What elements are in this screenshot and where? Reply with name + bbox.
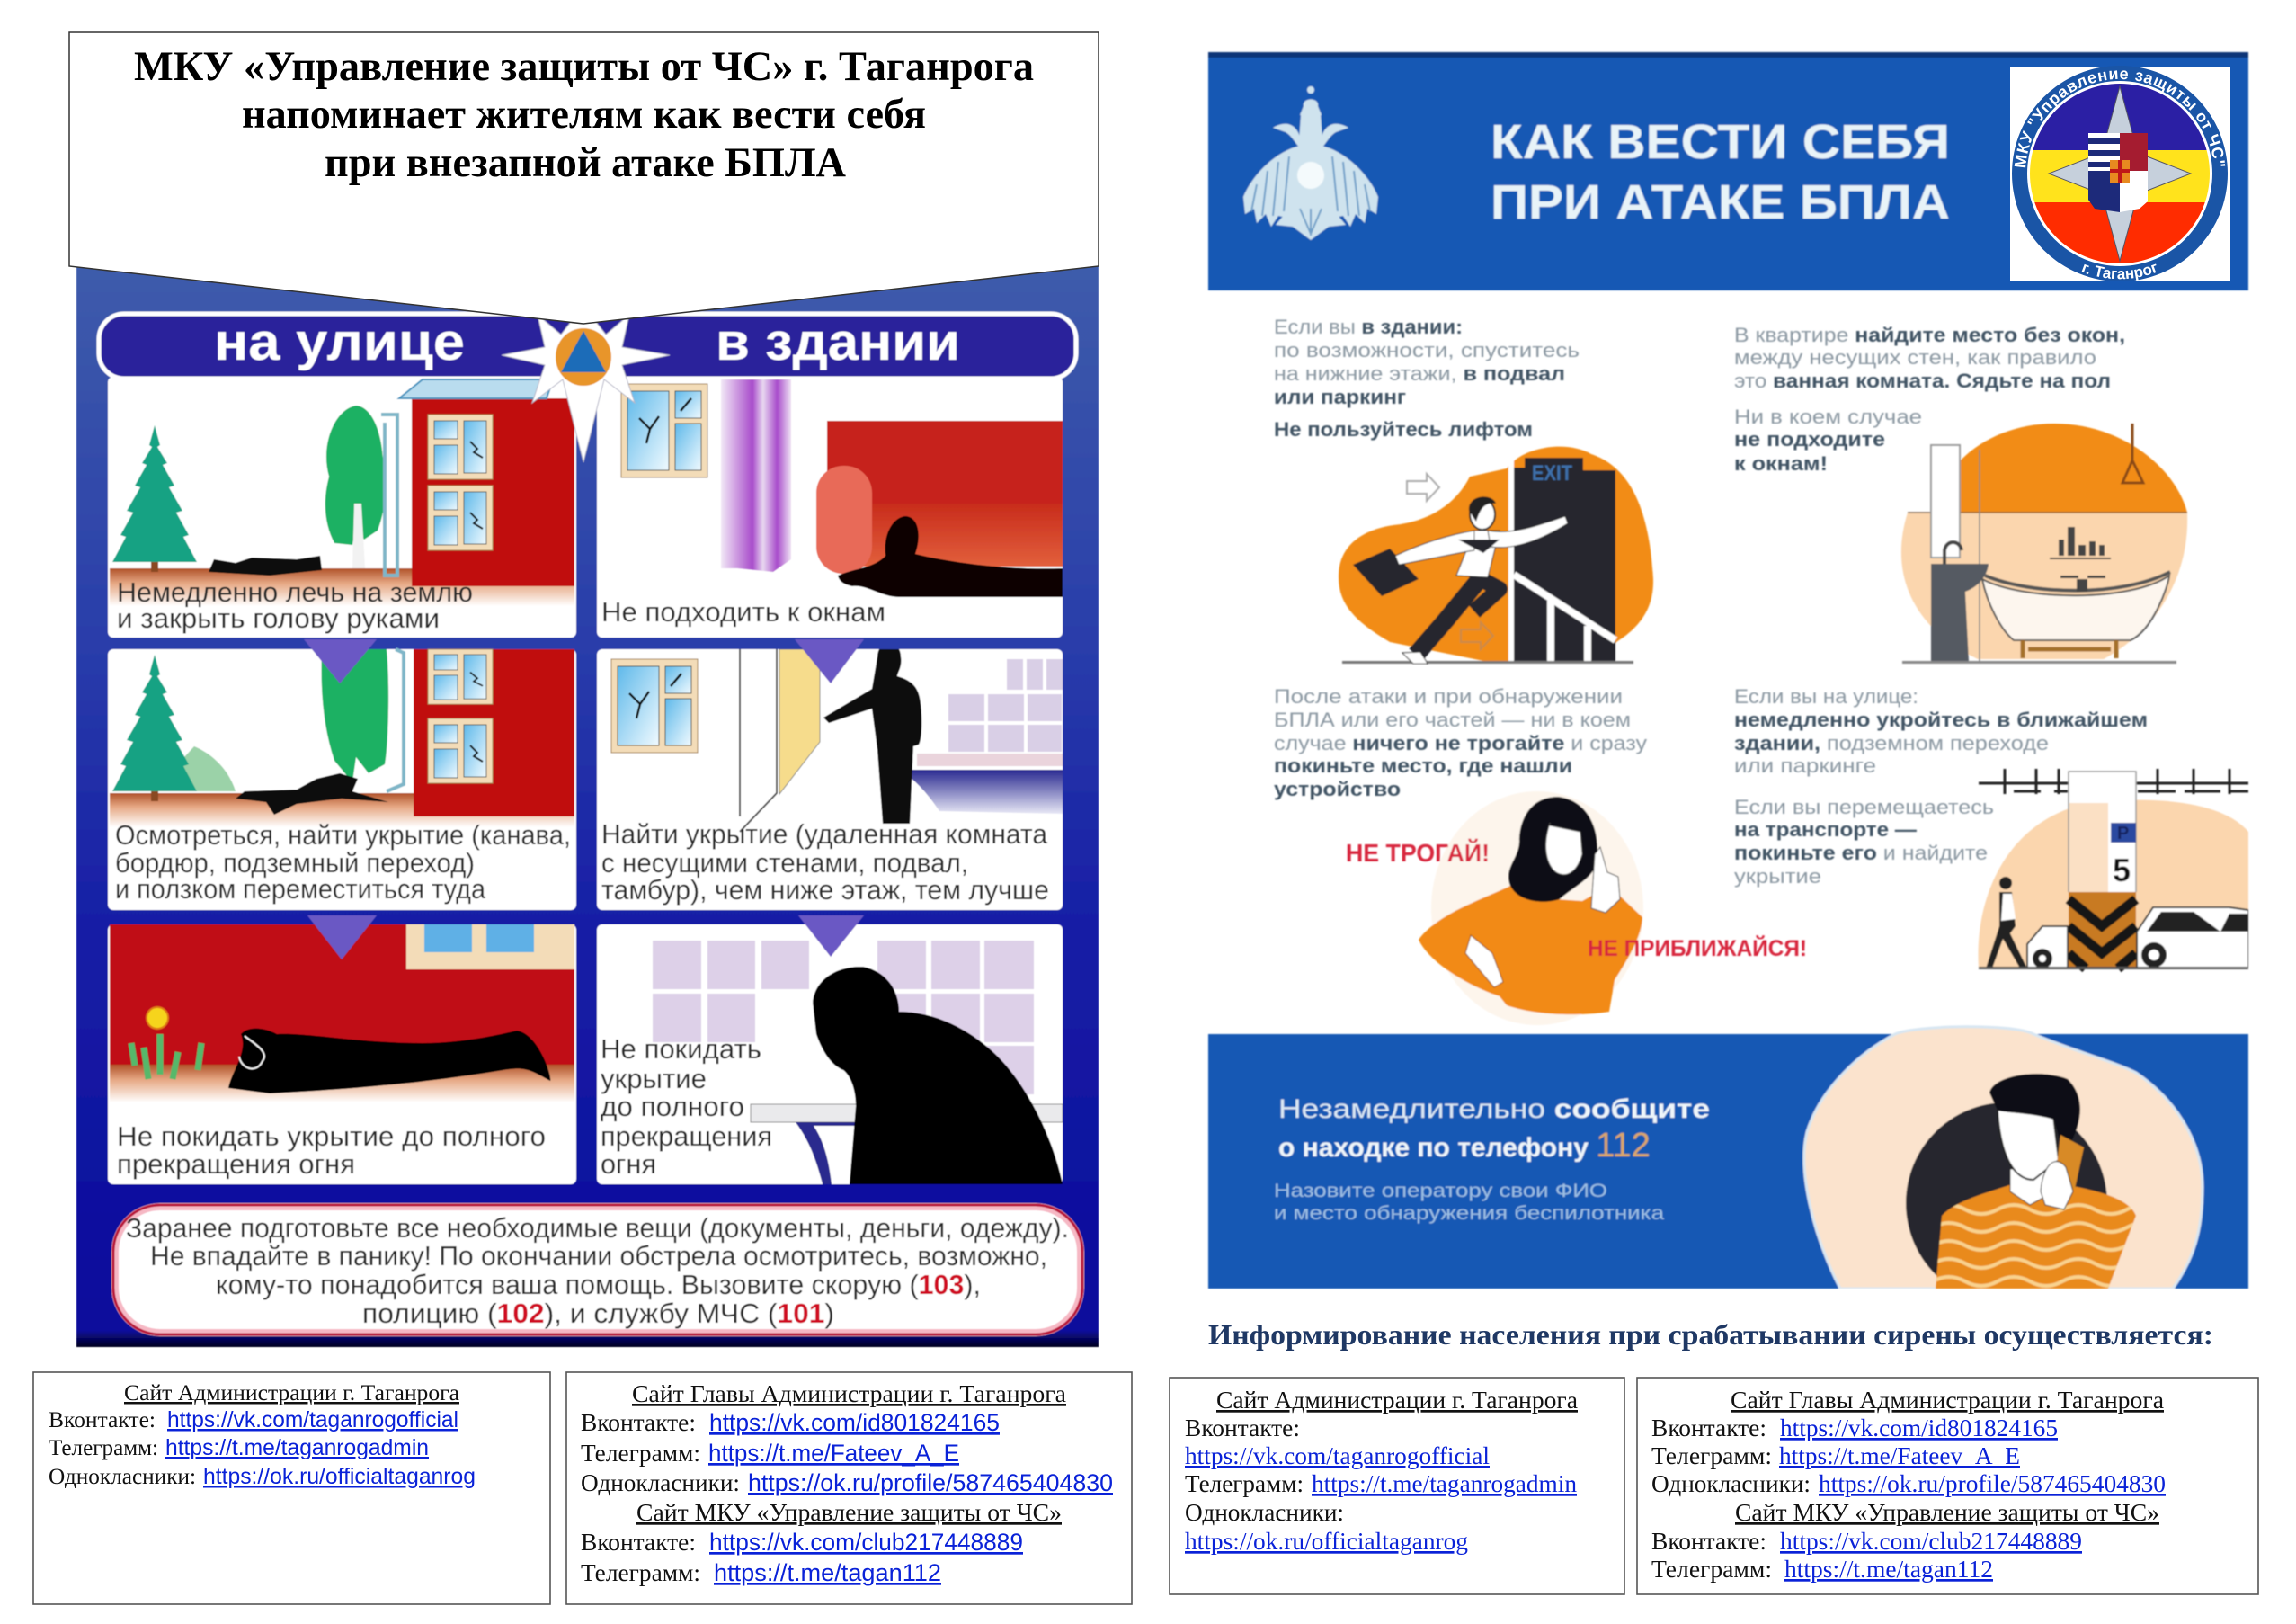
title: МКУ «Управление защиты от ЧС» г. Таганрога: [134, 43, 1034, 90]
section: text outdoors and transport: покиньте его и найдите: [1734, 842, 1988, 864]
caption: Не подходить к окнам: [601, 596, 885, 628]
contacts box: city administration (left): https://t.me/taganrogadmin: [165, 1435, 429, 1460]
section: text in apartment: не подходите: [1734, 428, 1885, 451]
section: text outdoors and transport: Если вы перемещаетесь: [1734, 796, 1994, 818]
contacts box: head of administration and MKU (right): Телеграмм:: [1651, 1556, 1772, 1583]
section: text outdoors and transport: укрытие: [1734, 865, 1821, 888]
section: text in apartment: это ванная комната. Сядьте на пол: [1734, 370, 2111, 392]
section: text in apartment: к окнам!: [1734, 452, 1828, 475]
icon: emergency ministry star emblem: [502, 306, 670, 462]
bottom banner: report to 112: Назовите оператору свои ФИО: [1274, 1181, 1607, 1201]
panel: stay in shelter indoors: [597, 924, 1063, 1184]
panel: stay in shelter outdoors: [108, 924, 576, 1184]
contacts box: city administration (right): Сайт Администрации г. Таганрога: [1216, 1387, 1578, 1414]
bottom banner: report to 112: Незамедлительно сообщите: [1278, 1094, 1710, 1124]
callout: preparation and emergency numbers: кому-то понадобится ваша помощь. Вызовите скорую (103),: [216, 1269, 981, 1300]
callout: preparation and emergency numbers: полицию (102), и службу МЧС (101): [362, 1298, 834, 1329]
banner title: [1491, 115, 1950, 229]
contacts box: head of administration and MKU (right): https://vk.com/id801824165: [1780, 1414, 2058, 1441]
contacts box: head of administration and MKU (right): https://t.me/Fateev_A_E: [1779, 1442, 2020, 1469]
bottom banner: report to 112: и место обнаружения беспилотника: [1274, 1203, 1664, 1224]
bottom banner: report to 112: о находке по телефону 112: [1278, 1127, 1651, 1164]
contacts box: city administration (left): Сайт Администрации г. Таганрога: [124, 1381, 459, 1405]
contacts box: city administration (left): https://vk.com/taganrogofficial: [167, 1407, 458, 1432]
section: text after attack: покиньте место, где нашли: [1274, 754, 1572, 777]
illustration: bathroom: [1901, 424, 2187, 664]
warning label: do not approach: НЕ ПРИБЛИЖАЙСЯ!: [1588, 934, 1807, 961]
contacts box: head of administration and MKU (right): Однокласники:: [1651, 1470, 1811, 1497]
section: text in apartment: между несущих стен, как правило: [1734, 346, 2096, 369]
section: text after attack: [1274, 685, 1647, 800]
contacts box: city administration (right): https://t.me/taganrogadmin: [1312, 1470, 1578, 1497]
contacts box: head of administration and MKU (left): https://vk.com/club217448889: [709, 1529, 1023, 1556]
section: text in apartment: Ни в коем случае: [1734, 406, 1922, 428]
contacts box: city administration (right): Однокласники:: [1185, 1499, 1344, 1526]
contacts box: city administration (left): Вконтакте:: [49, 1408, 156, 1432]
contacts box: city administration (right): [1170, 1378, 1624, 1594]
panel: do not approach windows: [597, 377, 1063, 638]
logo: MKU civil protection office: МКУ "Управление защиты от ЧС": [2014, 70, 2226, 167]
contacts box: head of administration and MKU (left): https://t.me/Fateev_A_E: [708, 1440, 959, 1467]
section: text in apartment: [1734, 324, 2125, 475]
caption: Не покидать укрытие до полного: [117, 1120, 546, 1152]
callout: preparation and emergency numbers: Не впадайте в панику! По окончании обстрела осмотритесь, возможно,: [150, 1240, 1047, 1272]
illustration: parking with pillar and cars: 5: [2113, 852, 2131, 888]
panel: stay in shelter indoors: укрытие: [601, 1063, 707, 1094]
contacts box: city administration (right): Вконтакте:: [1185, 1414, 1300, 1441]
section: text indoors: Не пользуйтесь лифтом: [1274, 418, 1533, 441]
section: text indoors: по возможности, спуститесь: [1274, 339, 1580, 361]
caption: Немедленно лечь на землю: [117, 576, 473, 608]
contacts box: head of administration and MKU (left): Вконтакте:: [581, 1529, 696, 1556]
section: text after attack: устройство: [1274, 778, 1401, 800]
panel: find shelter indoors: с несущими стенами, подвал,: [601, 847, 968, 879]
contacts box: head of administration and MKU (right): Вконтакте:: [1651, 1414, 1766, 1441]
panel: stay in shelter outdoors: прекращения огня: [117, 1148, 355, 1180]
arrows between panels: [304, 639, 864, 959]
section: text outdoors and transport: немедленно укройтесь в ближайшем: [1734, 709, 2148, 731]
contacts box: city administration (left): Однокласники:: [49, 1465, 196, 1489]
warning label: do not touch: НЕ ТРОГАЙ!: [1346, 838, 1490, 867]
contacts box: city administration (right): Телеграмм:: [1185, 1470, 1304, 1497]
illustration: parking with pillar and cars: P: [2117, 824, 2129, 843]
contacts box: head of administration and MKU (right): https://vk.com/club217448889: [1780, 1528, 2082, 1555]
contacts box: head of administration and MKU (left): https://ok.ru/profile/587465404830: [748, 1469, 1113, 1496]
poster blue background: [76, 252, 1099, 1347]
header callout box: [69, 32, 1099, 324]
contacts box: head of administration and MKU (right): Сайт МКУ «Управление защиты от ЧС»: [1735, 1499, 2159, 1526]
title: [134, 43, 1034, 186]
heading pill: outdoors and indoors: [99, 313, 1076, 379]
title: напоминает жителям как вести себя: [242, 91, 926, 138]
callout: preparation and emergency numbers: [113, 1205, 1082, 1334]
banner title: ПРИ АТАКЕ БПЛА: [1491, 175, 1950, 229]
illustration: man running to exit: EXIT: [1532, 461, 1572, 486]
contacts box: city administration (right): https://ok.ru/officialtaganrog: [1185, 1528, 1468, 1555]
contacts box: head of administration and MKU (right): https://ok.ru/profile/587465404830: [1819, 1470, 2166, 1497]
left poster: behaviour during attack: [76, 252, 1099, 1347]
banner title: КАК ВЕСТИ СЕБЯ: [1491, 115, 1950, 169]
section: text after attack: БПЛА или его частей — ни в коем: [1274, 709, 1631, 731]
section: text outdoors and transport: Если вы на улице:: [1734, 685, 1918, 708]
top banner: [1208, 52, 2248, 290]
panel: look around and crawl to shelter: и ползком переместиться туда: [115, 873, 486, 905]
section: text outdoors and transport: здании, подземном переходе: [1734, 732, 2049, 754]
panel: look around and crawl to shelter: [108, 649, 576, 910]
contacts box: head of administration and MKU (left): Однокласники:: [581, 1469, 740, 1496]
contacts box: head of administration and MKU (left): Телеграмм:: [581, 1559, 700, 1586]
logo: MKU civil protection office: [2010, 66, 2230, 281]
section: text in apartment: В квартире найдите место без окон,: [1734, 324, 2125, 346]
contacts box: city administration (left): Телеграмм:: [49, 1436, 158, 1460]
contacts box: head of administration and MKU (left): Вконтакте:: [581, 1409, 696, 1436]
contacts box: head of administration and MKU (right): Телеграмм:: [1651, 1442, 1772, 1469]
contacts box: head of administration and MKU (left): Сайт МКУ «Управление защиты от ЧС»: [636, 1499, 1062, 1526]
right poster: how to behave during UAV attack: [1208, 52, 2248, 1304]
caption: Не покидать: [601, 1033, 761, 1065]
section: text after attack: случае ничего не трогайте и сразу: [1274, 732, 1647, 754]
heading pill: outdoors and indoors: на улице: [214, 313, 465, 371]
section: text indoors: Если вы в здании:: [1274, 316, 1463, 338]
panel: stay in shelter indoors: прекращения: [601, 1120, 772, 1152]
contacts box: city administration (right): https://vk.com/taganrogofficial: [1185, 1442, 1490, 1469]
section: text indoors: [1274, 316, 1580, 441]
contacts box: head of administration and MKU (left): Сайт Главы Администрации г. Таганрога: [632, 1380, 1066, 1407]
illustration: parking with pillar and cars: [1978, 769, 2248, 969]
panel: lie down on the ground: [108, 377, 576, 638]
logo: MKU civil protection office: г. Таганрог: [2082, 264, 2156, 281]
title: при внезапной атаке БПЛА: [325, 139, 846, 186]
section: text indoors: на нижние этажи, в подвал: [1274, 362, 1565, 385]
illustration: man running to exit: [1339, 447, 1653, 664]
caption: Осмотреться, найти укрытие (канава,: [115, 819, 571, 851]
section: text outdoors and transport: [1734, 685, 2148, 888]
contacts box: head of administration and MKU (right): https://t.me/tagan112: [1784, 1556, 1993, 1583]
contacts box: head of administration and MKU (right): Сайт Главы Администрации г. Таганрога: [1731, 1387, 2164, 1414]
panel: find shelter indoors: тамбур), чем ниже этаж, тем лучше: [601, 874, 1049, 906]
icon: emergency ministry double-headed eagle: [1243, 86, 1378, 240]
section: text after attack: После атаки и при обнаружении: [1274, 685, 1623, 708]
contacts box: head of administration and MKU (left): [566, 1372, 1132, 1604]
panel: stay in shelter indoors: огня: [601, 1148, 656, 1180]
section: text outdoors and transport: или паркинге: [1734, 754, 1876, 777]
contacts box: head of administration and MKU (right): Вконтакте:: [1651, 1528, 1766, 1555]
heading: siren information: Информирование населения при срабатывании сирены осуществляется:: [1208, 1318, 2213, 1351]
contacts box: head of administration and MKU (right): [1637, 1378, 2258, 1594]
contacts box: head of administration and MKU (left): Телеграмм:: [581, 1440, 700, 1467]
panel: find shelter indoors: [597, 643, 1063, 910]
contacts box: city administration (left): https://ok.ru/officialtaganrog: [203, 1464, 476, 1489]
section: text outdoors and transport: на транспорте —: [1734, 818, 1917, 841]
contacts box: head of administration and MKU (left): https://t.me/tagan112: [714, 1559, 941, 1586]
callout: preparation and emergency numbers: Заранее подготовьте все необходимые вещи (документы, деньги, одежду).: [126, 1212, 1069, 1244]
caption: Найти укрытие (удаленная комната: [601, 818, 1048, 850]
panel: look around and crawl to shelter: бордюр, подземный переход): [115, 847, 475, 879]
illustration: man on phone: [1804, 1027, 2203, 1304]
heading pill: outdoors and indoors: в здании: [716, 313, 960, 371]
section: text indoors: или паркинг: [1274, 386, 1406, 408]
contacts box: city administration (left): [33, 1372, 550, 1604]
bottom banner: report to 112: [1208, 1027, 2248, 1304]
panel: stay in shelter indoors: до полного: [601, 1091, 744, 1122]
contacts box: head of administration and MKU (left): https://vk.com/id801824165: [709, 1409, 1000, 1436]
panel: lie down on the ground: и закрыть голову руками: [117, 602, 440, 634]
illustration: woman with warning hand: [1419, 791, 1643, 1025]
